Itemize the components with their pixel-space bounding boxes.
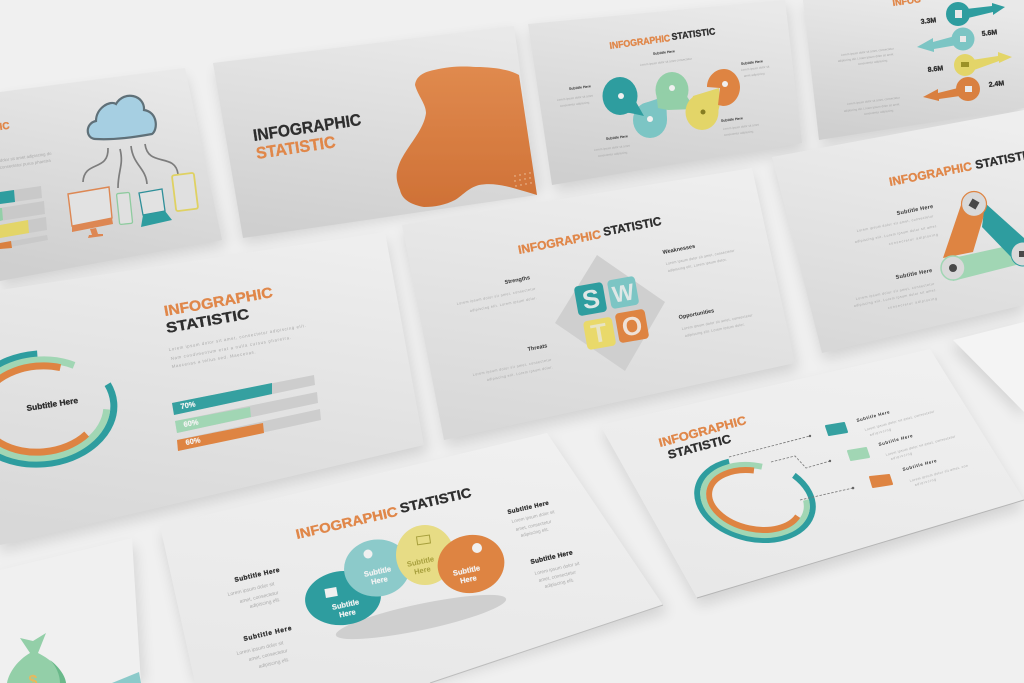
- title: [657, 413, 748, 462]
- bubble labels: [331, 554, 483, 621]
- swot labels: Lorem ipsum dolor sit amet, consectetur: [472, 358, 553, 377]
- bubble: teal: [302, 567, 384, 629]
- lorem text: [838, 47, 900, 116]
- bubble labels: Here: [459, 573, 477, 585]
- labels: [557, 49, 770, 158]
- labels: Subtitle Here: [606, 134, 628, 141]
- icon: yellow bubble screen: [417, 535, 430, 545]
- triangle bands: [943, 202, 1024, 281]
- bubble: light teal: [341, 536, 413, 600]
- tile O: O: [619, 309, 645, 343]
- tile T: [583, 317, 616, 350]
- text block: dolor sit amet adipiscing do: [0, 151, 52, 163]
- title: [888, 147, 1024, 189]
- tile W: [607, 276, 639, 309]
- subtitle blocks: adipiscing elit.: [544, 577, 575, 590]
- labels: Subtitle Here: [569, 84, 591, 91]
- panel: arrows slide: [803, 0, 1024, 140]
- icon: cloud: [88, 96, 156, 139]
- swot labels: [456, 244, 754, 382]
- subtitle blocks: adipiscing elit.: [258, 657, 290, 670]
- diamond backdrop: [555, 255, 665, 371]
- tile S: [574, 282, 607, 316]
- tile T: T: [589, 317, 610, 349]
- lorem text: Lorem ipsum dolor sit amet, consectetur: [847, 96, 900, 106]
- title: STATISTIC: [602, 214, 663, 239]
- legend text: [856, 409, 968, 487]
- panel: bubbles slide: [160, 433, 663, 683]
- values: 8.6M: [927, 65, 944, 74]
- values: [920, 17, 1005, 89]
- legend text: Subtitle Here: [856, 409, 891, 423]
- subtitle blocks: adipiscing elit.: [249, 597, 281, 610]
- bubble labels: Here: [338, 607, 356, 619]
- wave: orange node: [707, 69, 740, 106]
- ring chart: [690, 450, 820, 550]
- title: [609, 26, 716, 52]
- subtitle blocks: Subtitle Here: [234, 567, 281, 584]
- panel: cloud devices slide: [0, 68, 222, 281]
- title: STATISTIC: [671, 26, 716, 43]
- wave: green node: [656, 72, 695, 110]
- subtitle blocks: [227, 501, 581, 670]
- subtitle blocks: adipiscing elit. Lorem ipsum dolor sit amet.: [853, 288, 937, 308]
- slide background: [213, 26, 537, 238]
- text block: [0, 151, 52, 170]
- slide bottom edge: [430, 605, 663, 683]
- legend swatch green: [848, 448, 869, 460]
- hub icons: [949, 199, 1024, 272]
- legend text: adipiscing: [869, 427, 892, 437]
- labels: amet adipiscing: [744, 71, 765, 78]
- tile O: [615, 309, 649, 343]
- subtitle blocks: amet, consectetur: [248, 648, 288, 663]
- values: 2.4M: [988, 80, 1005, 89]
- wave: yellow node: [686, 88, 720, 130]
- icons: [955, 10, 972, 92]
- lorem text: consectetur adipiscing: [864, 108, 894, 116]
- donut label: Subtitle Here: [26, 396, 79, 413]
- swot labels: Weaknesses: [662, 244, 696, 256]
- icon: monitor: [68, 187, 113, 238]
- lorem text: consectetur adipiscing: [858, 58, 888, 66]
- orange blob: [397, 66, 537, 207]
- labels: Lorem ipsum dolor sit amet consectetur: [640, 57, 692, 67]
- legend swatch orange: [870, 475, 892, 487]
- lorem text: adipiscing elit. Lorem ipsum dolor sit amet: [838, 52, 894, 63]
- labels: Lorem ipsum dolor sit amet: [723, 123, 759, 131]
- arrow: yellow right: [954, 52, 1012, 76]
- bar labels: 70%: [180, 399, 196, 411]
- subtitle blocks: Lorem ipsum dolor sit: [511, 509, 556, 524]
- bubble: orange: [433, 530, 509, 598]
- panel: circular statistic slide: [0, 232, 424, 545]
- icon: tablet yellow: [172, 173, 198, 211]
- donut chart: [0, 348, 119, 470]
- dot pattern: [514, 172, 532, 187]
- slide background: [772, 110, 1024, 353]
- subtitle blocks: [853, 204, 938, 310]
- title: INFOGRAPHIC: [252, 111, 362, 145]
- title: INFOGRAPHIC: [163, 285, 275, 320]
- arrow: orange left: [923, 77, 980, 101]
- bubble labels: Subtitle: [452, 563, 481, 578]
- bar labels: 60%: [185, 435, 201, 447]
- slide background: [160, 433, 663, 683]
- bubble shadow: [333, 586, 509, 648]
- icons: [618, 81, 728, 122]
- subtitle blocks: Subtitle Here: [530, 549, 574, 566]
- title: STATISTIC: [165, 306, 251, 337]
- paragraph: Lorem ipsum dolor sit amet, consectetur adipiscing elit.: [168, 323, 306, 352]
- bubble labels: Here: [413, 564, 431, 576]
- swot labels: adipiscing elit. Lorem ipsum dolor.: [667, 258, 727, 273]
- wave: teal node: [602, 77, 644, 116]
- wave: light teal node: [633, 96, 667, 138]
- triangle hubs: [941, 192, 1024, 280]
- lorem text: adipiscing elit. Lorem ipsum dolor sit amet: [844, 102, 900, 113]
- legend text: Lorem ipsum dolor sit amet, con: [909, 464, 968, 483]
- subtitle blocks: consectetur adipiscing: [888, 233, 938, 246]
- subtitle blocks: amet, consectetur: [515, 519, 552, 532]
- subtitle blocks: adipiscing elit.: [520, 527, 549, 538]
- swot labels: Lorem ipsum dolor sit amet, consectetur: [665, 249, 736, 266]
- subtitle blocks: Subtitle Here: [507, 501, 550, 516]
- subtitle blocks: Lorem ipsum dolor sit: [236, 640, 285, 657]
- title: INFOGRAPHIC: [517, 227, 602, 257]
- slide background: [600, 349, 1024, 598]
- subtitle blocks: Lorem ipsum dolor sit amet, consectetur: [855, 282, 936, 301]
- legend text: Lorem ipsum dolor sit amet, consectetur: [885, 434, 957, 457]
- legend text: Lorem ipsum dolor sit amet, consectetur: [864, 409, 936, 432]
- title: INFOGRAPHIC: [657, 413, 748, 450]
- title: [252, 111, 362, 163]
- slide background: [803, 0, 1024, 140]
- panel: corner slide top right: [953, 322, 1024, 412]
- progress bars: [172, 375, 321, 451]
- paragraph: Maecenas a tellus sed. Maecenas.: [171, 349, 256, 369]
- slide background: [0, 68, 222, 281]
- title: STATISTIC: [398, 485, 473, 516]
- bar labels: [180, 399, 201, 447]
- labels: consectetur adipiscing: [560, 100, 590, 108]
- title: INFOGRAPHIC: [294, 504, 399, 542]
- values: 3.3M: [920, 17, 937, 26]
- subtitle blocks: amet, consectetur: [239, 590, 279, 605]
- labels: consectetur adipiscing: [598, 150, 628, 158]
- swot labels: adipiscing elit. Lorem ipsum dolor.: [486, 365, 553, 382]
- icon: yellow node drop: [700, 110, 706, 114]
- swot labels: Strengths: [504, 275, 531, 286]
- subtitle blocks: adipiscing elit. Lorem ipsum dolor sit amet.: [854, 224, 938, 244]
- bubble labels: Subtitle: [331, 597, 360, 612]
- subtitle blocks: Subtitle Here: [243, 625, 293, 643]
- panel: triangle slide: [772, 110, 1024, 353]
- panel: ring diagram slide: [600, 349, 1024, 598]
- paragraph: [168, 323, 306, 369]
- title: [517, 214, 663, 257]
- bubble labels: Here: [370, 574, 388, 586]
- labels: Lorem ipsum dolor sit amet: [557, 94, 593, 102]
- swot labels: Threats: [527, 343, 548, 353]
- swot labels: Lorem ipsum dolor sit amet, consectetur: [681, 313, 754, 331]
- swot labels: Opportunities: [678, 308, 715, 321]
- teal strip: [112, 672, 141, 683]
- swot labels: adipiscing elit. Lorem ipsum dolor.: [469, 296, 537, 313]
- subtitle blocks: Subtitle Here: [896, 204, 934, 217]
- bubble: yellow: [396, 525, 454, 585]
- subtitle blocks: Lorem ipsum dolor sit: [534, 561, 581, 577]
- labels: Subtitle Here: [653, 49, 675, 56]
- labels: Lorem ipsum dolor sit amet: [594, 144, 630, 152]
- legend text: Subtitle Here: [878, 433, 914, 447]
- title: [294, 485, 473, 542]
- text block: consectetur purus pharetra: [0, 158, 52, 170]
- slide background: [402, 168, 795, 440]
- progress bars: [0, 186, 48, 249]
- panel: SWOT slide: [402, 168, 795, 440]
- subtitle blocks: Subtitle Here: [895, 268, 933, 281]
- labels: Subtitle Here: [741, 59, 763, 66]
- title: STATISTIC: [666, 431, 733, 462]
- title: STATISTIC: [255, 133, 337, 163]
- swot labels: adipiscing elit. Lorem ipsum dolor.: [684, 322, 745, 338]
- legend text: Subtitle Here: [902, 458, 938, 472]
- icon: phone green: [116, 192, 133, 225]
- slide background: [528, 0, 802, 185]
- tile W: W: [610, 278, 636, 308]
- lorem text: Lorem ipsum dolor sit amet, consectetur: [841, 47, 894, 57]
- legend swatch teal: [826, 423, 847, 435]
- values: 5.6M: [981, 29, 998, 38]
- dashed connectors: [729, 436, 853, 500]
- icon: money bag: [7, 633, 66, 683]
- slide bottom edge: [697, 500, 1024, 598]
- subtitle blocks: Lorem ipsum dolor sit amet, consectetur: [856, 214, 935, 233]
- labels: consectetur adipiscing: [724, 129, 754, 137]
- title: [163, 285, 275, 337]
- connector endpoints: [809, 435, 854, 489]
- subtitle blocks: Lorem ipsum dolor sit: [227, 581, 276, 598]
- bar labels: 60%: [183, 417, 199, 429]
- title: INFOGRAPHIC: [609, 33, 671, 52]
- panel: title slide: [213, 26, 537, 238]
- labels: Lorem ipsum dolor sit: [741, 65, 770, 72]
- icon: laptop: [139, 189, 172, 227]
- panel: wave process slide: [528, 0, 802, 185]
- arrow: teal right: [946, 2, 1005, 26]
- labels: Subtitle Here: [721, 116, 743, 123]
- legend text: adipiscing: [890, 451, 913, 461]
- tile S: S: [580, 283, 602, 315]
- legend text: adipiscing: [914, 477, 937, 487]
- subtitle blocks: consectetur adipiscing: [887, 297, 937, 310]
- subtitle blocks: amet, consectetur: [538, 569, 577, 584]
- slide background: [0, 232, 424, 545]
- paragraph: Nam condimentum erat a nulla cursus pharetra.: [170, 335, 291, 361]
- panel: money bag slide: [0, 538, 141, 683]
- icon: yellow chart: [961, 62, 969, 67]
- swot labels: Lorem ipsum dolor sit amet, consectetur: [456, 287, 537, 306]
- bubble labels: Subtitle: [406, 554, 435, 569]
- bubble labels: Subtitle: [363, 564, 392, 579]
- arrow: light teal left: [917, 28, 974, 52]
- slide background: [0, 538, 141, 683]
- connector lines: [83, 144, 178, 188]
- bubble icons: [324, 543, 482, 598]
- title: INFOGRAPHIC: [888, 159, 973, 189]
